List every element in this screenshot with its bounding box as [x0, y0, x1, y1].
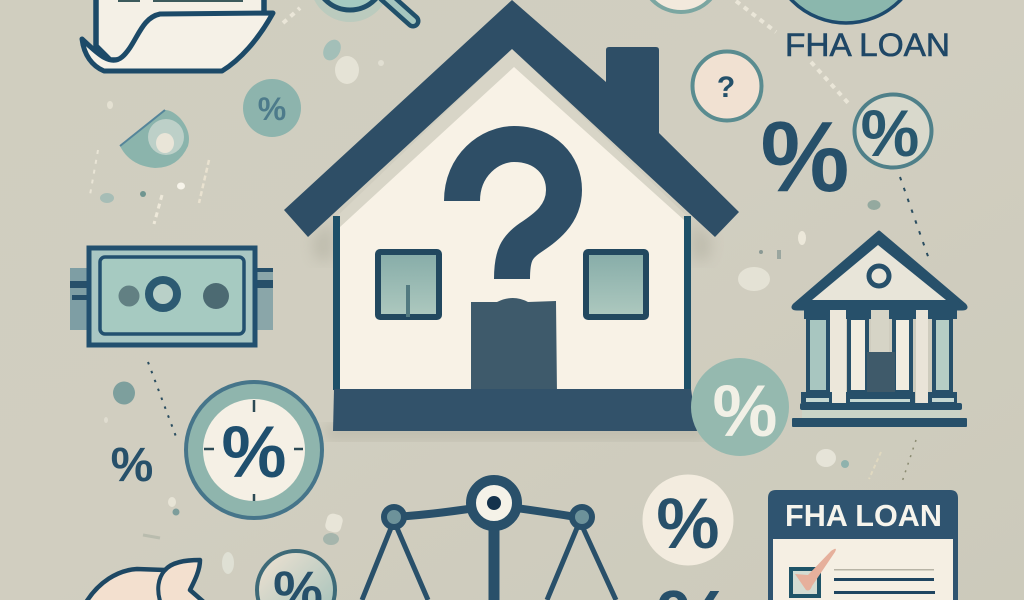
right window	[586, 252, 646, 317]
house eave shadows	[312, 222, 712, 260]
icon: folder	[80, 0, 276, 74]
icon: price tag	[120, 110, 189, 168]
heading: FHA loan: FHA LOAN	[785, 27, 950, 63]
icon: question circle	[692, 52, 762, 120]
icon: piggy bank	[84, 558, 205, 600]
decorative dotted connector right	[900, 177, 930, 262]
form lines	[834, 569, 935, 594]
icon: bottom percent ring	[255, 549, 337, 600]
card header	[768, 490, 958, 600]
check mark	[795, 549, 836, 590]
icon: small percent circle: %	[258, 91, 286, 127]
icon: currency note	[70, 248, 273, 345]
question mark	[462, 144, 564, 279]
FHA loan form card	[768, 490, 958, 600]
small percent sign: %	[111, 439, 153, 492]
door	[471, 298, 557, 395]
left window	[378, 252, 439, 317]
decorative pale dotted connectors	[283, 1, 850, 105]
icon: balance scale	[360, 475, 618, 600]
checkbox	[791, 569, 819, 596]
house illustration	[284, 0, 739, 431]
decorative specks lower left	[104, 382, 344, 574]
decorative specks lower right	[816, 440, 916, 482]
icon: percent ring: %	[861, 96, 919, 170]
icon: teal percent circle: %	[713, 371, 777, 452]
roof and chimney	[284, 0, 739, 237]
icon: percent dial: %	[222, 412, 286, 493]
house shadow	[325, 425, 707, 439]
house front wall	[340, 67, 684, 390]
icon: large teal circle	[789, 0, 903, 25]
icon: magnifying glass	[314, 0, 420, 28]
icon: top question circle	[650, 0, 712, 14]
icon: cream percent circle	[642, 474, 734, 566]
house wall outline	[333, 216, 691, 390]
decorative specks right	[738, 200, 880, 291]
decorative dotted connector left	[148, 362, 178, 442]
icon: teal percent circle	[691, 358, 789, 456]
foundation	[333, 389, 697, 431]
icon: small percent circle	[243, 79, 301, 137]
decorative specks left	[90, 101, 209, 224]
icon: percent dial	[186, 382, 322, 518]
icon: question circle: ?	[717, 71, 735, 104]
house gable underlay	[333, 49, 691, 390]
card body	[773, 539, 953, 600]
decorative specks top center	[320, 36, 384, 84]
card title: FHA LOAN	[785, 498, 942, 533]
large percent sign: %	[761, 101, 849, 213]
icon: bank building	[792, 232, 967, 427]
icon: cream percent circle: %	[656, 485, 720, 564]
